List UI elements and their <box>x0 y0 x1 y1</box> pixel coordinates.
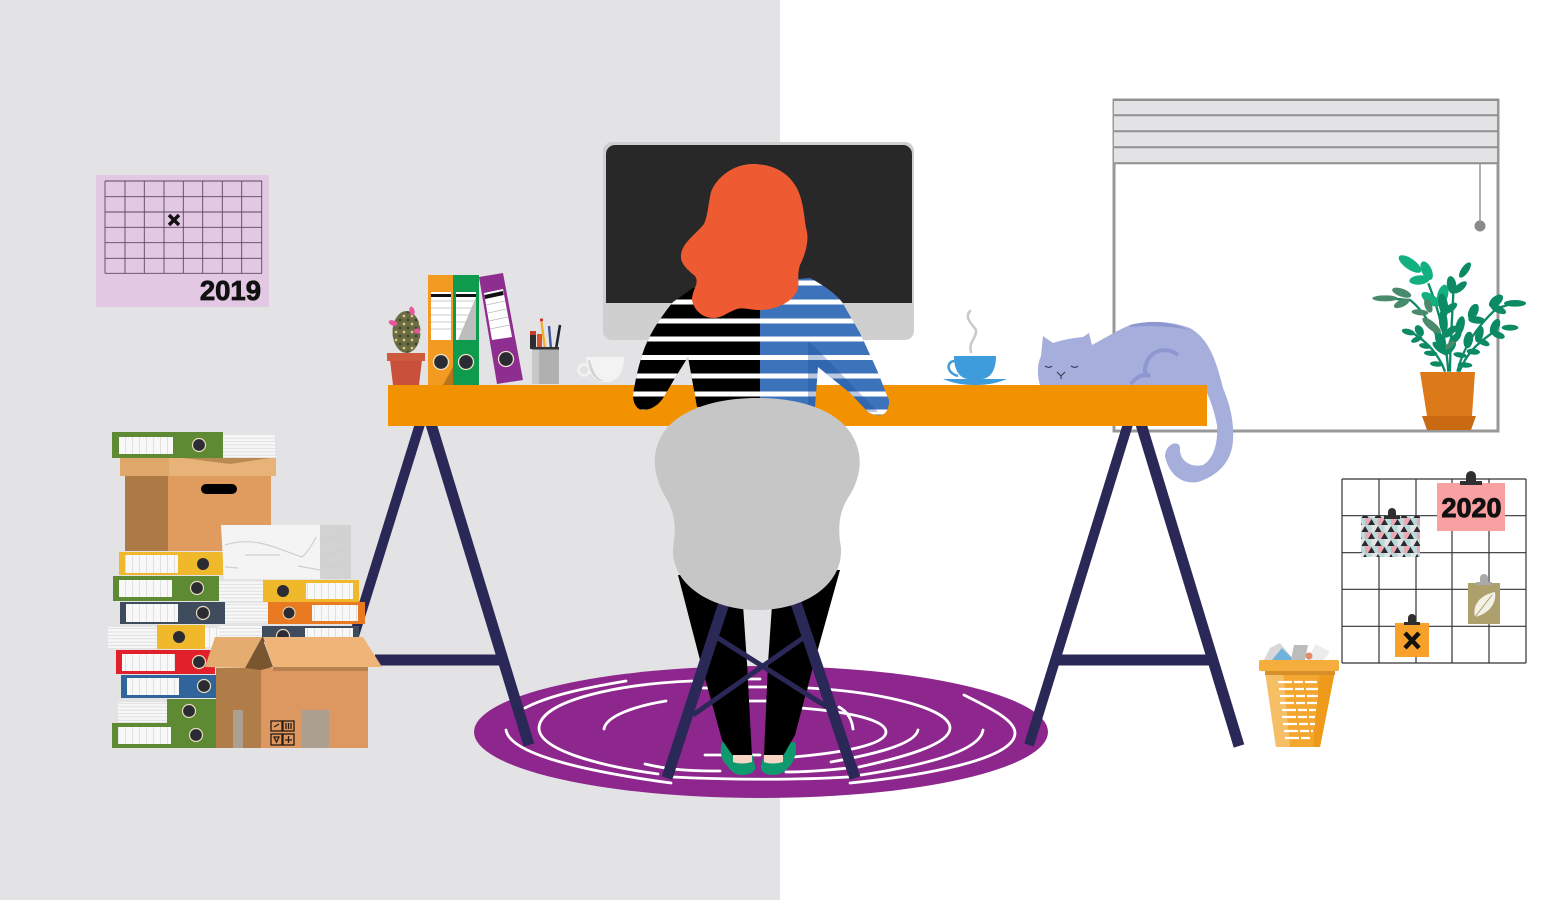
rug swirl lines <box>506 679 1015 783</box>
desk legs: right trestle <box>1029 424 1239 746</box>
desk legs: left trestle <box>320 424 529 745</box>
slate binder <box>120 602 268 624</box>
computer monitor <box>603 142 914 340</box>
top green binder <box>112 432 275 458</box>
cactus in pot <box>387 306 425 385</box>
box shadow seam <box>245 637 273 670</box>
green binder, pages left <box>118 699 217 723</box>
stool legs <box>667 600 855 778</box>
cat haunch outline <box>1131 350 1178 384</box>
terracotta pot <box>390 360 422 385</box>
wire grid <box>1342 479 1526 663</box>
slate binder, right stack <box>219 626 359 642</box>
stool <box>655 398 860 778</box>
cactus flowers <box>388 306 420 334</box>
left flap <box>205 637 262 668</box>
crumpled papers <box>1264 643 1330 662</box>
box tape strips <box>233 710 329 748</box>
wire memo board <box>1342 471 1526 663</box>
background: grey left half <box>0 0 780 900</box>
desk top <box>388 385 1207 426</box>
pens <box>530 318 560 349</box>
black trousers <box>678 570 840 756</box>
archive box <box>120 458 276 551</box>
calendar cross mark <box>169 215 179 225</box>
green binder upright <box>453 275 479 385</box>
orange binder upright <box>428 275 453 385</box>
orange X note <box>1395 614 1429 657</box>
calendar year: 2019 <box>200 275 261 306</box>
rug <box>474 666 1048 798</box>
bin rim <box>1259 660 1339 671</box>
purple binder leaning <box>479 273 523 384</box>
white tea cup <box>578 357 624 382</box>
pen holder <box>530 318 560 384</box>
orange binder <box>226 602 365 624</box>
green binder with pages <box>113 576 263 602</box>
bottom green binder <box>112 723 217 748</box>
bare ankles <box>733 755 783 764</box>
waste paper bin <box>1259 643 1339 747</box>
yellow binder, right stack <box>219 580 359 602</box>
pink 2020 note: 2020 <box>1441 493 1502 523</box>
right flap <box>263 637 382 667</box>
red binder <box>116 650 215 674</box>
olive leaf note <box>1468 574 1500 624</box>
right stack with papers and open box <box>205 525 382 748</box>
potted plant <box>1372 252 1526 430</box>
sleeping cat <box>1038 322 1233 482</box>
wall calendar 2019 <box>96 175 269 307</box>
blue binder <box>121 675 217 698</box>
yellow binder, spine right <box>108 625 220 649</box>
cat face <box>1045 366 1078 379</box>
steam <box>968 311 976 352</box>
cup <box>954 356 996 379</box>
pot saucer <box>1422 416 1476 430</box>
blue coffee cup with steam <box>943 311 1007 385</box>
saucer <box>943 379 1007 385</box>
left stack of binders and archive box <box>108 432 276 748</box>
calendar grid <box>105 181 262 273</box>
red hair <box>681 164 807 318</box>
clip <box>1460 471 1482 485</box>
open cardboard box <box>205 637 382 748</box>
plant leaves <box>1372 252 1526 372</box>
leaf <box>1474 592 1495 617</box>
green shoes <box>721 742 796 775</box>
bin body <box>1265 671 1335 747</box>
chair seat back <box>655 398 860 610</box>
box handling symbols <box>271 721 294 745</box>
cup handle <box>949 361 958 376</box>
bin slots <box>1278 682 1320 738</box>
clip <box>1384 508 1400 519</box>
pink 2020 note <box>1437 471 1505 531</box>
patterned note <box>1361 508 1420 557</box>
yellow binder <box>119 552 223 575</box>
stack of loose papers <box>221 525 351 579</box>
sweater <box>625 275 895 420</box>
clip <box>1404 614 1420 625</box>
window with blind <box>1114 100 1498 431</box>
clip <box>1476 574 1492 585</box>
plant pot <box>1420 372 1475 416</box>
woman in striped sweater <box>625 164 895 775</box>
